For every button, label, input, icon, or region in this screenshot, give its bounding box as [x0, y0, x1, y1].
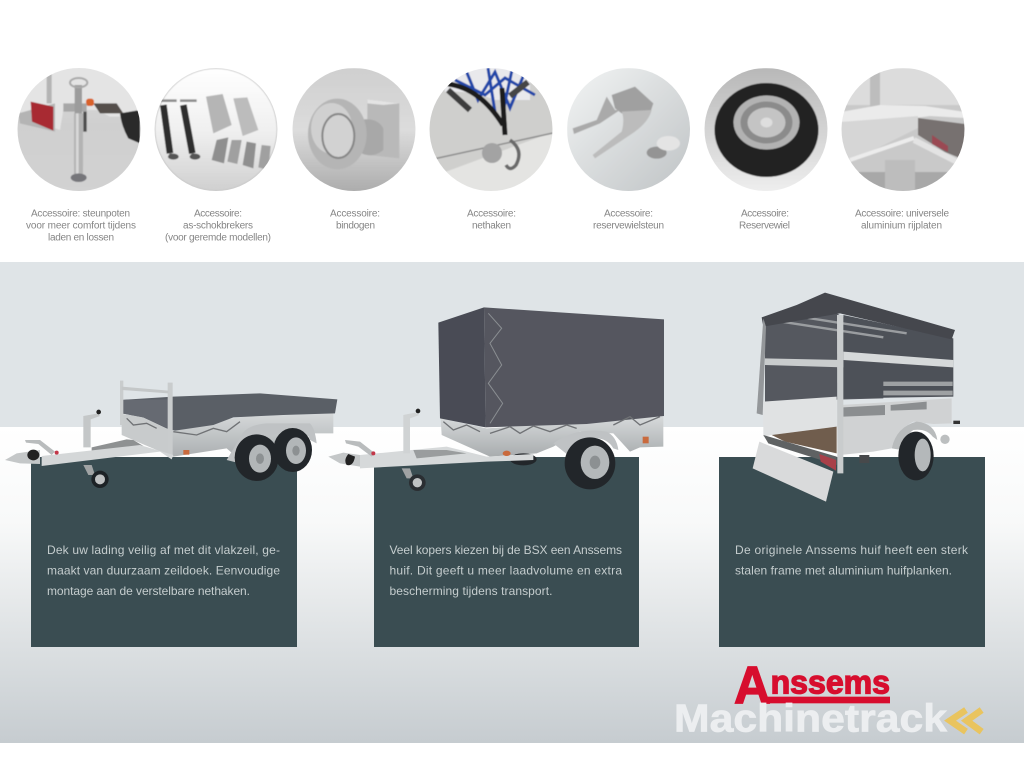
- caption: bindogen: bindogen: [336, 220, 375, 232]
- logo: Anssems: nssems: [771, 664, 890, 701]
- panel text: stalen frame: stalen frame met aluminium huifplanken.: [735, 563, 952, 577]
- panel text: BSX huif: Veel kopers kiezen bij de BSX een Anssems: [390, 543, 622, 557]
- caption: steunpoten: voor meer comfort tijdens: [26, 220, 136, 232]
- panel text: vlakzeil: Dek uw lading veilig af met dit vlakzeil, ge-: [47, 543, 280, 557]
- trailer photo: flat cover tandem axle: [5, 381, 337, 488]
- caption: as-schokbrekers: Accessoire:: [194, 209, 242, 220]
- caption: nethaken: nethaken: [472, 220, 511, 232]
- caption: universele aluminium rijplaten: aluminium rijplaten: [861, 220, 942, 232]
- accessory photo: bindogen: [292, 68, 416, 192]
- panel text: BSX huif: bescherming tijdens transport.: [390, 584, 552, 598]
- caption: reservewiel: Reservewiel: [739, 220, 790, 232]
- caption: reservewielsteun: Accessoire:: [604, 209, 653, 220]
- panel text: BSX huif: huif. Dit geeft u meer laadvolume en extra: [390, 563, 622, 577]
- caption: nethaken: Accessoire:: [467, 209, 516, 220]
- caption: reservewielsteun: reservewielsteun: [593, 220, 664, 232]
- caption: universele aluminium rijplaten: Accessoire: universele: [855, 209, 949, 220]
- panel: BSX huif: [374, 457, 639, 647]
- panel text: vlakzeil: montage aan de verstelbare nethaken.: [47, 584, 250, 598]
- panel: vlakzeil: [31, 457, 297, 647]
- caption: as-schokbrekers: (voor geremde modellen): [165, 232, 271, 243]
- caption: as-schokbrekers: as-schokbrekers: [183, 220, 253, 232]
- background band: upper grey: [0, 262, 1024, 427]
- panel text: vlakzeil: maakt van duurzaam zeildoek. Eenvoudige: [47, 563, 280, 577]
- panel: stalen frame: [719, 457, 985, 647]
- accessory photo: nethaken: [429, 68, 553, 192]
- accessory photo: reservewiel: [704, 68, 828, 192]
- trailer photo: open tailgate with frame: [753, 293, 960, 502]
- caption: bindogen: Accessoire:: [330, 209, 380, 220]
- caption: reservewiel: Accessoire:: [741, 209, 789, 220]
- logo: Anssems: A: [734, 656, 771, 715]
- accessory photo: aluminium rijplaten: [841, 68, 965, 192]
- accessory photo: as-schokbrekers: [154, 68, 278, 192]
- caption: steunpoten: laden en lossen: [48, 232, 114, 243]
- accessory photo: reservewielsteun: [567, 68, 691, 192]
- panel text: stalen frame: De originele Anssems huif heeft een sterk: [735, 543, 969, 557]
- trailer photo: high cover single axle: [328, 307, 664, 491]
- logo: Machinetrack: Machinetrack: [674, 698, 947, 740]
- background band: lower gradient: [0, 427, 1024, 743]
- logo: Anssems: [734, 656, 890, 715]
- logo: yellow chevrons: [950, 710, 982, 732]
- accessory photo: steunpoten: [17, 67, 141, 192]
- caption: steunpoten: Accessoire: steunpoten: [31, 209, 130, 220]
